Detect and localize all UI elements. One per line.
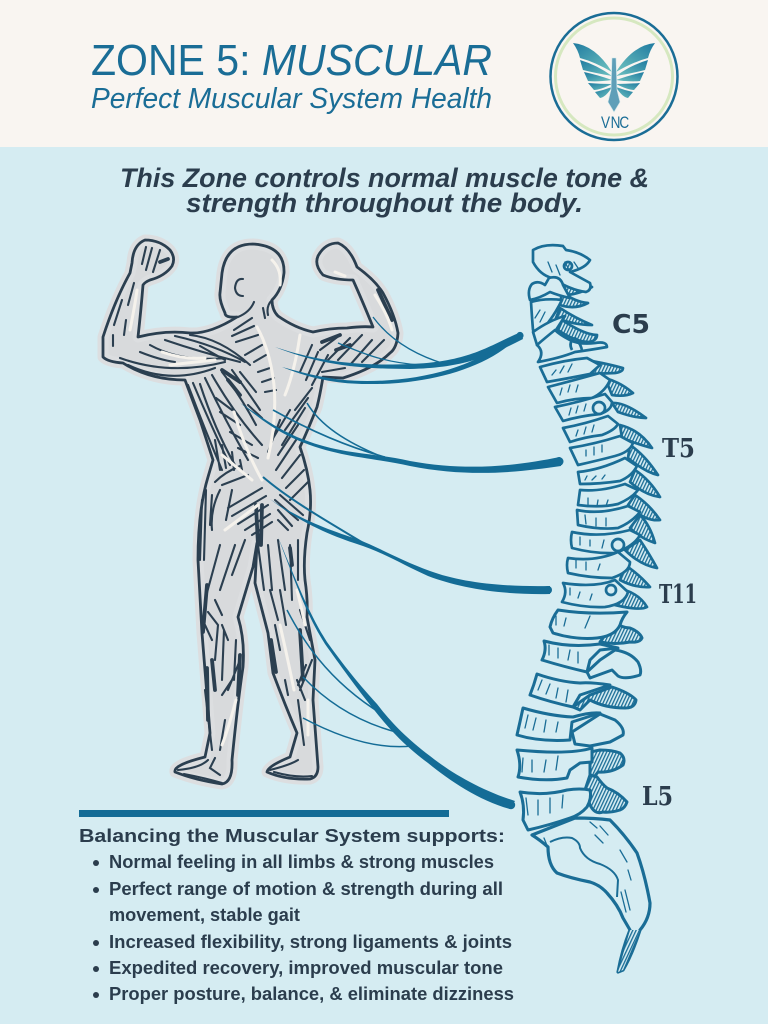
nerve: T11 [263, 477, 552, 594]
label: T11: T11 [659, 580, 697, 610]
divider bar [79, 810, 449, 817]
label: C5: C5 [612, 310, 650, 340]
bullet 2 [93, 879, 503, 925]
title: ZONE 5: MUSCULAR [91, 36, 492, 85]
muscle striations [113, 247, 384, 783]
spine illustration [517, 245, 660, 972]
nerve: L5 [278, 537, 515, 809]
bullet 2: Perfect range of motion & strength during all [109, 879, 503, 899]
heading statement [120, 163, 649, 218]
dark muscle accents [160, 259, 392, 720]
lumbar vertebrae [517, 610, 642, 830]
logo: VNC butterfly spine [550, 13, 678, 140]
cervical vertebrae [529, 245, 607, 362]
logo text: VNC [601, 114, 629, 132]
sacrum and coccyx [532, 818, 650, 972]
subtitle: Perfect Muscular System Health [91, 83, 492, 115]
bullet 4: Expedited recovery, improved muscular tone [109, 958, 503, 978]
label: L5: L5 [642, 782, 673, 812]
label: T5: T5 [662, 434, 695, 464]
spine hatching [522, 262, 631, 912]
benefits list [79, 825, 514, 1004]
heading statement: strength throughout the body. [186, 188, 583, 218]
nerve: T5 [240, 403, 564, 473]
thoracic vertebrae [540, 358, 660, 609]
muscle highlights [130, 260, 392, 745]
bullet 3: Increased flexibility, strong ligaments & joints [109, 932, 512, 952]
bullet 5: Proper posture, balance, & eliminate dizziness [109, 984, 514, 1004]
nerves [240, 317, 564, 809]
nerve: C5 [275, 317, 524, 384]
heading statement: This Zone controls normal muscle tone & [120, 163, 649, 193]
list heading: Balancing the Muscular System supports: [79, 825, 505, 846]
bullet 2: movement, stable gait [109, 905, 300, 925]
header band [0, 0, 768, 147]
muscular body figure [103, 240, 398, 784]
bullet 1: Normal feeling in all limbs & strong muscles [109, 852, 494, 872]
spine labels [612, 310, 697, 812]
